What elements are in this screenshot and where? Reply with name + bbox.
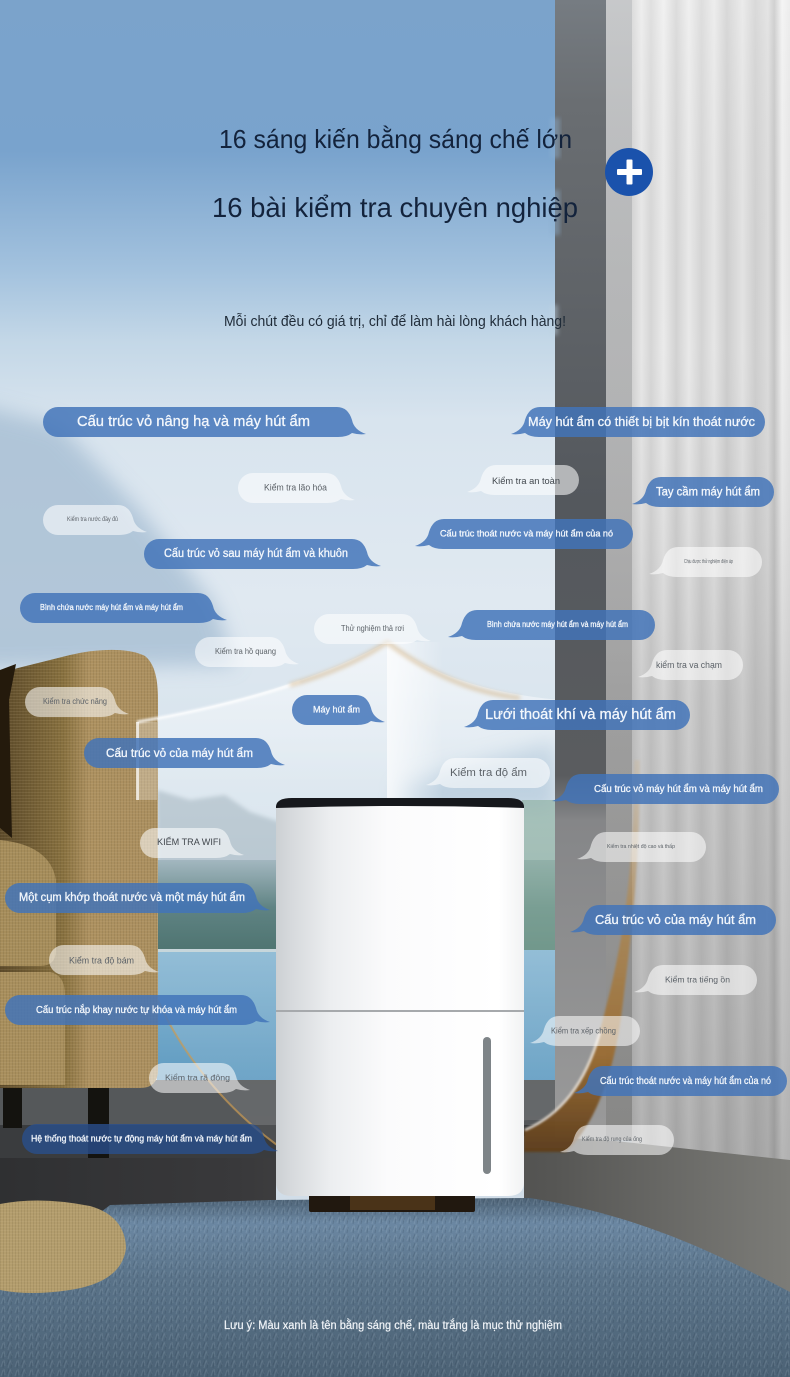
bubble: water tank right: Bình chứa nước máy hút ẩm và máy hút ẩm: [487, 620, 628, 629]
title: [212, 124, 578, 223]
bubble: safety test: [467, 465, 579, 495]
cushion: [0, 1200, 126, 1293]
bubble: humidity test: [426, 758, 550, 788]
bubble: lifting shell: [43, 407, 366, 437]
bubble: drain seal: Máy hút ẩm có thiết bị bịt kín thoát nước: [528, 415, 755, 429]
product: dehumidifier: [276, 798, 524, 1212]
bubble: drainage top: [415, 519, 633, 549]
dome of light: [157, 642, 560, 1145]
subtitle: Mỗi chút đều có giá trị, chỉ để làm hài lòng khách hàng!: [224, 313, 566, 330]
floor: [0, 1136, 790, 1377]
bubble: pipe vibration test: [560, 1125, 674, 1155]
bubble: dehumidifier: [292, 695, 385, 725]
bubble: water tank left: [20, 593, 227, 623]
bubble: shell structure right: [570, 905, 776, 935]
bubble: temperature test: [577, 832, 706, 862]
bubble: voltage test: [649, 547, 762, 577]
bubble: defrost test: [149, 1063, 250, 1093]
bubble: shell structure right: Cấu trúc vỏ của máy hút ẩm: [595, 912, 756, 927]
footnote: Lưu ý: Màu xanh là tên bằng sáng chế, màu trắng là mục thử nghiệm: [224, 1319, 562, 1332]
bubble: air grille: Lưới thoát khí và máy hút ẩm: [485, 706, 676, 723]
water level window: [483, 1037, 491, 1174]
bubble: adhesion test: Kiểm tra độ bám: [69, 956, 134, 966]
bubble: aging test: [238, 473, 355, 503]
test labels (white bubbles): [25, 465, 762, 1155]
title: 16 sáng kiến bằng sáng chế lớn: [219, 124, 572, 154]
bubble: lifting shell: Cấu trúc vỏ nâng hạ và máy hút ẩm: [77, 413, 310, 430]
bubble: pipe vibration test: Kiểm tra độ rung của ống: [582, 1136, 642, 1143]
bubble: auto drain: Hệ thống thoát nước tự động máy hút ẩm và máy hút ẩm: [31, 1134, 252, 1144]
bubble: function test: Kiểm tra chức năng: [43, 697, 107, 706]
bubble: aging test: Kiểm tra lão hóa: [264, 482, 327, 492]
bubble: drainage bottom: [574, 1066, 787, 1096]
bubble: water tank right: [448, 610, 655, 640]
bubble: shell right: Cấu trúc vỏ máy hút ẩm và máy hút ẩm: [594, 783, 763, 795]
bubble: shell structure left: Cấu trúc vỏ của máy hút ẩm: [106, 748, 253, 760]
bubble: tray lid: Cấu trúc nắp khay nước tự khóa và máy hút ẩm: [36, 1003, 237, 1016]
title glow on wall: [550, 118, 560, 335]
patent labels (blue bubbles): [5, 407, 787, 1154]
bubble: full water test: [43, 505, 147, 535]
bubble: auto drain: [22, 1124, 278, 1154]
bubble: adhesion test: [49, 945, 159, 975]
icon: plus badge: [605, 148, 653, 196]
armchair: [0, 650, 158, 1160]
glowing arc: [137, 642, 640, 1152]
title: 16 bài kiểm tra chuyên nghiệp: [212, 192, 578, 223]
bubble: rear shell: [144, 539, 381, 569]
bubble: drop test: [314, 614, 431, 644]
light beam: [387, 642, 443, 802]
sheer curtain: [606, 0, 790, 1160]
bubble: impact test: kiểm tra va chạm: [656, 660, 722, 670]
bubble: humidity test: Kiểm tra độ ẩm: [450, 767, 527, 779]
bubble: noise test: [634, 965, 757, 995]
bubble: rear shell: Cấu trúc vỏ sau máy hút ẩm và khuôn: [164, 548, 348, 560]
bubble: shell right: [552, 774, 779, 804]
dark wall column: [555, 0, 606, 1140]
bubble: drainage bottom: Cấu trúc thoát nước và máy hút ẩm của nó: [600, 1075, 771, 1087]
bubble: safety test: Kiểm tra an toàn: [492, 476, 560, 487]
bubble: arc test: [195, 637, 299, 667]
bubble: air grille: [464, 700, 690, 730]
bubble: full water test: Kiểm tra nước đầy đủ: [67, 516, 118, 523]
bubble: dehumidifier: Máy hút ẩm: [313, 704, 360, 716]
bubble: drop test: Thử nghiệm thả rơi: [341, 624, 404, 633]
bubble: handle: [632, 477, 774, 507]
bubble: stacking test: [530, 1016, 640, 1046]
bubble: function test: [25, 687, 129, 717]
bubble: wifi test: [140, 828, 244, 858]
bubble: drain joint: Một cụm khớp thoát nước và một máy hút ẩm: [19, 892, 245, 904]
bubble: stacking test: Kiểm tra xếp chồng: [551, 1026, 616, 1036]
bubble: noise test: Kiểm tra tiếng ồn: [665, 974, 730, 984]
bubble: wifi test: KIỂM TRA WIFI: [157, 836, 221, 848]
bubble: voltage test: Chịu được thử nghiệm điện áp: [684, 558, 733, 565]
bubble: arc test: Kiểm tra hồ quang: [215, 647, 276, 656]
bubble: handle: Tay cầm máy hút ẩm: [656, 486, 760, 498]
bubble: temperature test: Kiểm tra nhiệt độ cao và thấp: [607, 843, 675, 850]
bubble: impact test: [638, 650, 743, 680]
dome frame strip: [136, 722, 157, 800]
bubble: tray lid: [5, 995, 270, 1025]
bubble: water tank left: Bình chứa nước máy hút ẩm và máy hút ẩm: [40, 602, 183, 612]
bubble: drainage top: Cấu trúc thoát nước và máy hút ẩm của nó: [440, 528, 613, 540]
bubble: drain joint: [5, 883, 270, 913]
bubble: drain seal: [511, 407, 765, 437]
bubble: shell structure left: [84, 738, 285, 768]
bubble: defrost test: Kiểm tra rã đông: [165, 1072, 230, 1082]
rug: [0, 1198, 790, 1377]
